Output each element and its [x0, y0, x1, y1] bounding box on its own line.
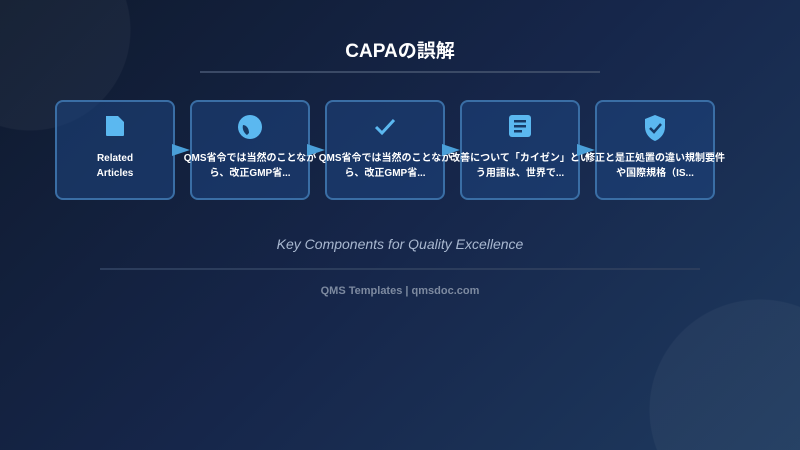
text: ら、改正GMP省...: [209, 168, 291, 179]
text: ら、改正GMP省...: [344, 168, 426, 179]
text: QMS省令では当然のことなが: [184, 153, 316, 164]
footer: QMS Templates | qmsdoc.com: [321, 285, 479, 297]
arrow 4: [577, 144, 595, 156]
icon: list document: [509, 115, 531, 137]
card 4: [460, 100, 580, 200]
card 2: [190, 100, 310, 200]
arrow 1: [172, 144, 190, 156]
subtitle: Key Components for Quality Excellence: [277, 236, 523, 252]
text: [319, 152, 451, 179]
icon: shield check: [645, 115, 665, 141]
text: [450, 152, 590, 179]
icon: globe: [238, 115, 262, 139]
card 1: Related Articles: [55, 100, 175, 200]
arrow 2: [307, 144, 325, 156]
text: [96, 153, 133, 179]
text: 修正と是正処置の違い規制要件: [585, 153, 725, 164]
text: [184, 152, 316, 179]
title: CAPAの誤解: [345, 41, 455, 62]
card 3: [325, 100, 445, 200]
arrow 3: [442, 144, 460, 156]
text: う用語は、世界で...: [476, 168, 564, 179]
icon: document: [106, 116, 124, 136]
text: 改善について「カイゼン」とい: [450, 153, 590, 164]
text: Related: [97, 153, 133, 164]
icon: check: [375, 119, 395, 135]
text: [585, 152, 725, 179]
text: や国際規格（IS...: [616, 168, 694, 179]
card 5: [595, 100, 715, 200]
text: QMS省令では当然のことなが: [319, 153, 451, 164]
text: Articles: [97, 168, 133, 179]
